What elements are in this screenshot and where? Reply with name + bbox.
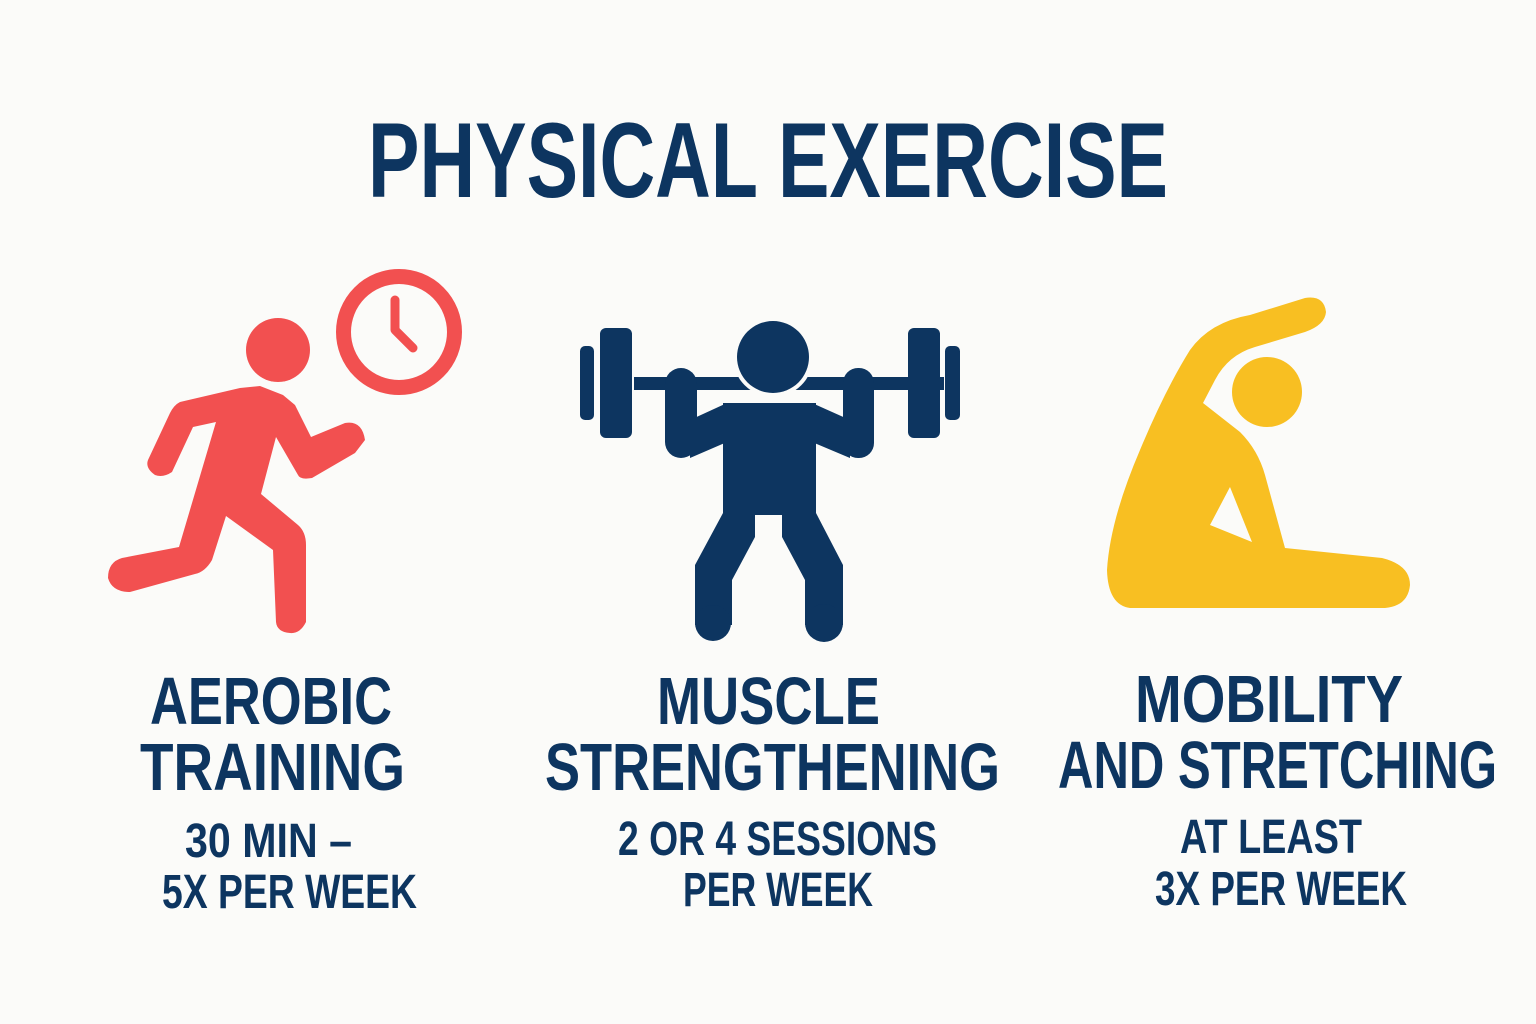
text: strength frequency: PER WEEK: [683, 864, 873, 917]
panel: mobility and stretching: [1058, 298, 1497, 916]
text: aerobic frequency: 5X PER WEEK: [162, 866, 417, 919]
title: PHYSICAL EXERCISE: [368, 100, 1168, 220]
icon: stretching figure: [1107, 298, 1410, 608]
heading: aerobic training: [140, 664, 405, 805]
heading: muscle strengthening: MUSCLE: [657, 664, 880, 739]
heading: aerobic training: AEROBIC: [150, 664, 392, 739]
text: aerobic frequency: [162, 815, 417, 919]
panel: aerobic training: [108, 276, 454, 919]
text: mobility frequency: AT LEAST: [1180, 811, 1362, 864]
icon: weightlifter: [580, 317, 960, 642]
heading: mobility and stretching: [1058, 662, 1497, 803]
text: mobility frequency: [1155, 811, 1407, 916]
text: strength frequency: 2 OR 4 SESSIONS: [618, 813, 937, 866]
icon: runner with clock: [108, 276, 454, 633]
text: mobility frequency: 3X PER WEEK: [1155, 863, 1407, 916]
text: aerobic frequency: 30 MIN –: [185, 815, 352, 868]
heading: aerobic training: TRAINING: [140, 730, 405, 805]
heading: muscle strengthening: STRENGTHENING: [545, 730, 1000, 805]
heading: mobility and stretching: MOBILITY: [1135, 662, 1403, 737]
text: strength frequency: [618, 813, 937, 917]
panel: muscle strengthening: [545, 317, 1000, 917]
heading: muscle strengthening: [545, 664, 1000, 805]
